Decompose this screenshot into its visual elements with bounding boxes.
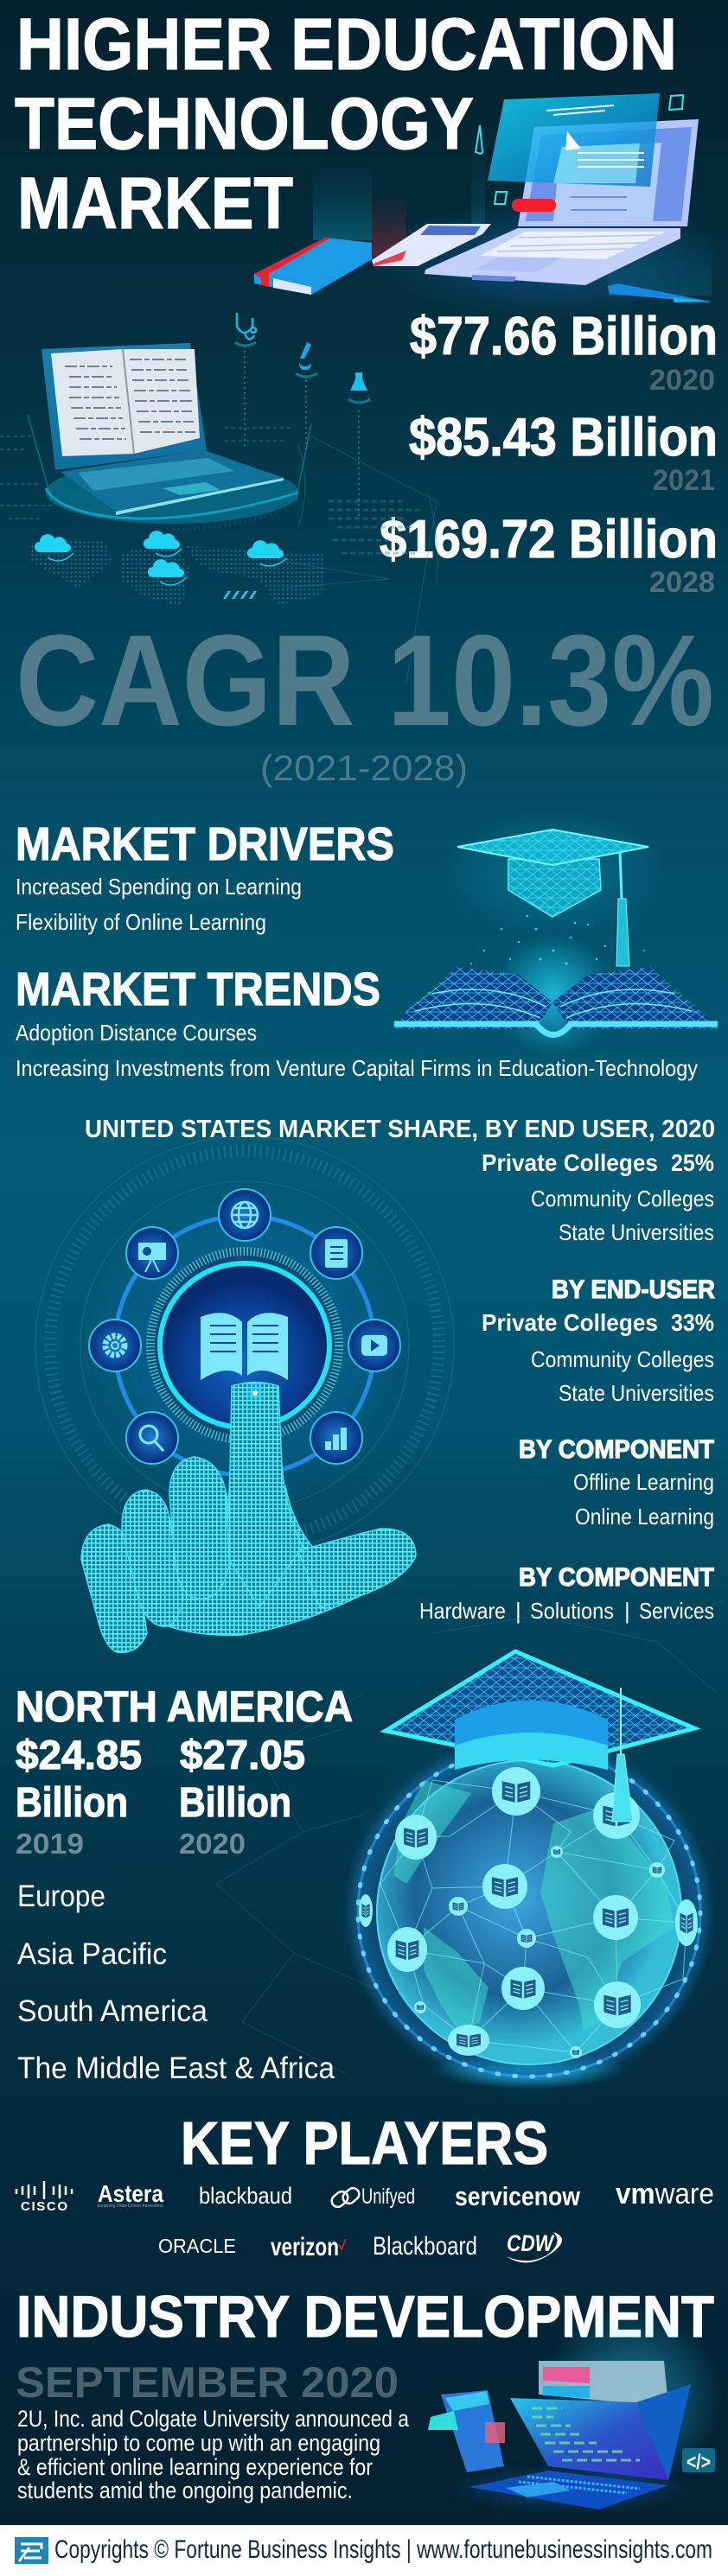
icon: microscope [296, 342, 317, 377]
by end-user list: Private Colleges [482, 1309, 658, 1336]
other regions list [17, 1880, 335, 2085]
illustration: graduation cap over open book [394, 808, 718, 1054]
end-user share list 2020 [482, 1149, 714, 1245]
icon: flask [348, 372, 370, 403]
illustration: laptop with phone and code: </> [686, 2451, 711, 2474]
icon: search [140, 1426, 163, 1451]
north america regional figures: $27.05 [180, 1732, 305, 1778]
logo: verizon: verizon [271, 2233, 339, 2261]
end-user share list 2020: 25% [671, 1149, 714, 1176]
logo: vmware: vmware [616, 2178, 714, 2210]
market drivers: Flexibility of Online Learning [16, 909, 266, 935]
title: TECHNOLOGY [15, 83, 474, 164]
logo: blackboard: Blackboard [373, 2232, 477, 2261]
icon: bars [325, 1428, 347, 1450]
illustration: digital learning ring with pointing hand [35, 1136, 454, 1652]
by end-user list: BY END-USER [552, 1275, 715, 1304]
market trends: MARKET TRENDS [16, 964, 380, 1015]
market size figures: 2020 [649, 364, 715, 397]
industry development text: 2U, Inc. and Colgate University announced a [17, 2406, 410, 2432]
by component list: BY COMPONENT [519, 1435, 714, 1464]
market trends: Adoption Distance Courses [16, 1020, 257, 1046]
footer logo [15, 2537, 48, 2564]
market drivers: MARKET DRIVERS [16, 818, 394, 870]
logo: cisco [16, 2181, 72, 2214]
title: MARKET [17, 162, 293, 244]
end-user share list 2020: Private Colleges [482, 1149, 658, 1176]
by component list two: | [624, 1598, 630, 1624]
by component list two: Solutions [530, 1598, 614, 1624]
illustration: laptop with open book and science icons [0, 313, 437, 683]
key players heading: KEY PLAYERS [181, 2109, 548, 2177]
by component list two: Hardware [419, 1598, 506, 1624]
world map dots [30, 539, 324, 607]
industry development text [16, 2358, 410, 2503]
industry development text: SEPTEMBER 2020 [16, 2358, 399, 2407]
by component list: Offline Learning [573, 1469, 714, 1495]
ring badges [89, 1189, 400, 1464]
logo: cdw: CDW [507, 2230, 555, 2256]
by component list two [419, 1563, 714, 1624]
other regions list: South America [17, 1994, 208, 2028]
north america regional figures: Billion [179, 1780, 291, 1826]
north america regional figures: Billion [16, 1780, 128, 1826]
logo: astera: Astera [98, 2180, 163, 2207]
industry development text: & efficient online learning experience for [17, 2454, 373, 2480]
market trends [16, 964, 698, 1081]
title [15, 3, 677, 244]
icon: stethoscope [235, 313, 256, 346]
north america regional figures [16, 1682, 353, 1860]
icon: presentation [138, 1243, 166, 1272]
by end-user list [482, 1275, 715, 1406]
title: HIGHER EDUCATION [16, 3, 677, 85]
north america regional figures: NORTH AMERICA [16, 1682, 353, 1731]
cap [386, 1651, 694, 1765]
logo: unifyed [329, 2185, 415, 2210]
icon: clipboard [325, 1239, 348, 1268]
continents [393, 1780, 674, 2031]
footer bar [0, 2525, 728, 2576]
market size figures [380, 307, 718, 599]
hand mesh [81, 1383, 416, 1652]
network lines [380, 1780, 686, 2052]
section title: united states market share: UNITED STATES MARKET SHARE, BY END USER, 2020 [85, 1116, 715, 1143]
other regions list: The Middle East & Africa [17, 2051, 335, 2085]
icon: play [361, 1335, 387, 1356]
other regions list: Europe [17, 1880, 105, 1913]
market drivers: Increased Spending on Learning [16, 874, 302, 900]
other regions list: Asia Pacific [17, 1937, 167, 1971]
by component list two: | [515, 1598, 521, 1624]
icon: globe [232, 1202, 258, 1228]
market size figures: 2021 [653, 464, 715, 497]
illustration: globe with graduation cap [216, 1599, 728, 2111]
CAGR figure: (2021-2028) [260, 747, 468, 788]
book badges [359, 1767, 698, 2058]
north america regional figures: 2019 [16, 1828, 84, 1860]
icon: gear [105, 1336, 125, 1355]
by end-user list: 33% [671, 1309, 714, 1336]
by component list two: BY COMPONENT [519, 1563, 714, 1592]
illustration: laptop with phone and code [428, 2307, 722, 2515]
logo: oracle: ORACLE [158, 2235, 236, 2257]
market drivers [16, 818, 394, 935]
north america regional figures: $24.85 [16, 1732, 142, 1778]
icon: clouds [35, 531, 287, 599]
north america regional figures: 2020 [179, 1828, 246, 1860]
by component list [519, 1435, 714, 1530]
icon: central book [201, 1313, 288, 1380]
market size figures: 2028 [649, 566, 715, 599]
logo: cisco: CISCO [21, 2199, 67, 2214]
logo: astera: Enabling Data-Driven Innovation [98, 2204, 163, 2209]
logo: servicenow: servicenow [455, 2181, 581, 2211]
industry development text: partnership to come up with an engaging [17, 2430, 380, 2456]
logo: blackbaud: blackbaud [199, 2183, 292, 2209]
logo: unifyed: Unifyed [361, 2185, 415, 2209]
industry development text: students amid the ongoing pandemic. [17, 2477, 353, 2503]
illustration: laptop, calculator and book [254, 93, 728, 320]
by component list two: Services [639, 1598, 714, 1624]
